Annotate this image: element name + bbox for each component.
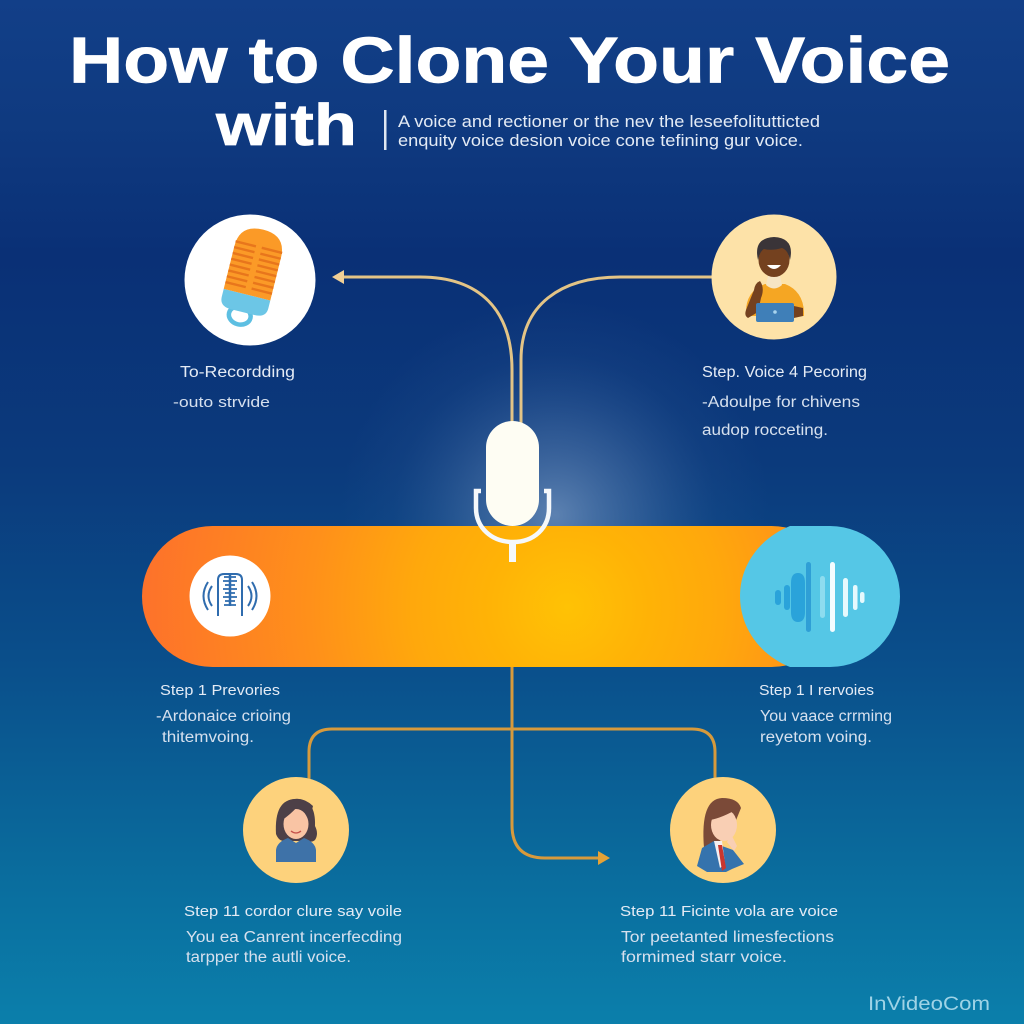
- text: top right step: Step. Voice 4 Pecoring: [702, 364, 867, 381]
- text: bottom right step: formimed starr voice.: [621, 949, 787, 966]
- connector: lower branches: [309, 666, 715, 865]
- title: How to Clone Your Voice: [69, 24, 950, 96]
- text: step left middle: -Ardonaice crioing: [156, 708, 291, 725]
- text: bottom left step: [184, 903, 402, 966]
- text: bottom right step: Step 11 Ficinte vola are voice: [620, 903, 838, 920]
- text: step left middle: Step 1 Prevories: [160, 682, 280, 699]
- text: top right step: -Adoulpe for chivens: [702, 394, 860, 411]
- text: top left step: To-Recordding: [180, 364, 295, 381]
- icon: central microphone: [476, 421, 549, 562]
- icon: studio mic badge: [190, 556, 270, 636]
- text: step left middle: thitemvoing.: [162, 729, 254, 746]
- text: bottom left step: You ea Canrent incerfecding: [186, 929, 402, 946]
- panel: orange bar: [142, 526, 900, 667]
- connector: top right line: [521, 277, 714, 425]
- text: step right middle: You vaace crrming: [760, 708, 892, 725]
- text: step right middle: reyetom voing.: [760, 729, 872, 746]
- text: step left middle: [156, 682, 291, 746]
- subtitle block: enquity voice desion voice cone tefining gur voice.: [398, 132, 803, 150]
- text: bottom right step: [620, 903, 838, 966]
- icon: businesswoman on phone: [670, 777, 776, 883]
- icon: blue sound wave circle: [740, 526, 900, 667]
- subtitle block: [384, 110, 820, 150]
- text: bottom left step: tarpper the autli voice.: [186, 949, 351, 966]
- text: bottom right step: Tor peetanted limesfections: [621, 929, 834, 946]
- text: top right step: [702, 364, 867, 439]
- text: top left step: -outo strvide: [173, 394, 270, 411]
- text: step right middle: [759, 682, 892, 746]
- subtitle block: A voice and rectioner or the nev the leseefolitutticted: [398, 113, 820, 131]
- connector: top left arrow: [332, 270, 512, 425]
- icon: retro microphone circle: [184, 214, 316, 346]
- icon: woman portrait: [243, 777, 349, 883]
- watermark: InVideoCom: [868, 994, 990, 1015]
- title: [69, 24, 950, 158]
- title: with: [215, 93, 357, 158]
- text: bottom left step: Step 11 cordor clure say voile: [184, 903, 402, 920]
- text: top left step: [173, 364, 295, 411]
- text: top right step: audop rocceting.: [702, 422, 828, 439]
- text: step right middle: Step 1 I rervoies: [759, 682, 874, 699]
- icon: person with laptop: [712, 214, 836, 340]
